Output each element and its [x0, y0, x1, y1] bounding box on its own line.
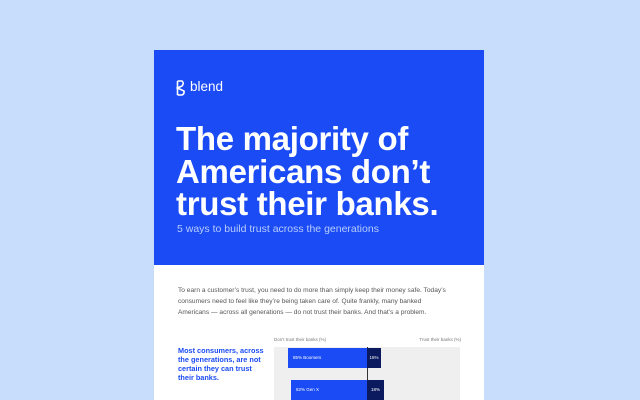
bar: gen x	[291, 380, 384, 400]
bar chart	[274, 337, 461, 400]
title: The majority of	[176, 120, 408, 157]
subtitle: 5 ways to build trust across the generations	[177, 223, 379, 235]
title	[176, 120, 438, 222]
title: Americans don’t	[176, 152, 430, 190]
bar: gen x: 18%	[371, 387, 380, 392]
intro text: To earn a customer’s trust, you need to do more than simply keep their money safe. Today’s consumers need to feel like they’re being taken care of. Quite frankly, many banked Americans — across all generations — do not trust their banks. And that’s a problem.	[178, 287, 446, 316]
axis labels: Trust their banks (%)	[419, 337, 461, 342]
bar: gen x: 82% Gen X	[296, 387, 319, 392]
callout: key finding: Most consumers, across	[178, 346, 264, 355]
callout: key finding	[178, 346, 264, 382]
logo: blend	[190, 79, 223, 94]
axis labels: Don’t trust their banks (%)	[274, 337, 326, 342]
panel: header card	[154, 50, 484, 265]
panel: body	[154, 265, 484, 400]
callout: key finding: their banks.	[178, 373, 219, 382]
callout: key finding: certain they can trust	[178, 364, 252, 373]
icon: blend mark	[176, 80, 185, 96]
axis labels	[274, 337, 461, 342]
bar: boomers	[288, 348, 381, 368]
logo	[176, 79, 223, 96]
bar: boomers: 15%	[369, 355, 378, 360]
bar: boomers: 85% Boomers	[293, 355, 321, 360]
title: trust their banks.	[176, 185, 438, 222]
callout: key finding: the generations, are not	[178, 355, 261, 364]
